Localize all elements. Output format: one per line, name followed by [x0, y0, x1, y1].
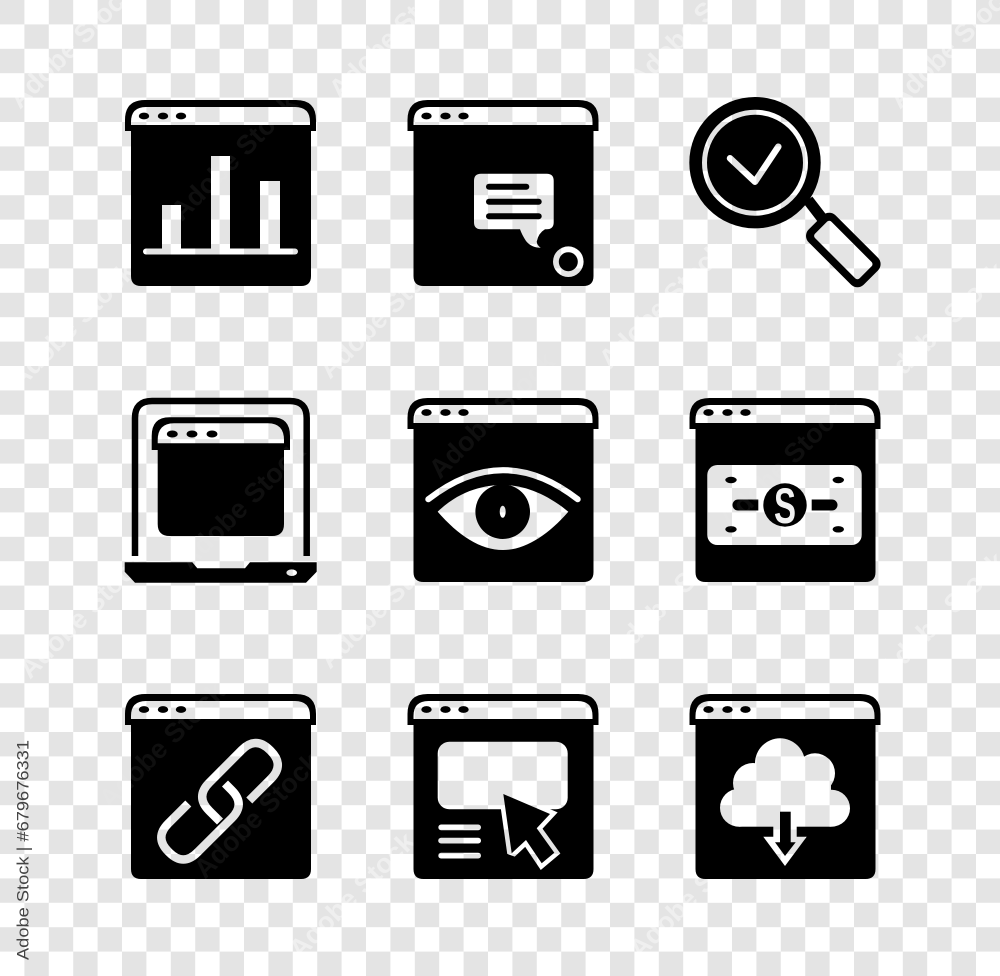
- side credit text: Adobe Stock | #679676331: [14, 740, 32, 960]
- watermark layer on icons: Adobe Stock: [173, 436, 312, 574]
- banknote: [707, 465, 862, 545]
- icon: browser with speech bubble: [408, 100, 598, 286]
- watermark layer on background: Adobe Stock: [623, 826, 762, 964]
- watermark layer on background: Adobe Stock: [13, 546, 152, 684]
- check mark: [730, 147, 778, 182]
- watermark layer on icons: [93, 88, 852, 884]
- icon: browser with bar chart: [125, 100, 316, 286]
- icon: browser with cursor click: [408, 694, 598, 879]
- icon: browser with banknote: [690, 398, 880, 582]
- icon: browser with chain link: [125, 694, 316, 879]
- eye: [438, 484, 568, 550]
- watermark layer on background: Adobe Stock: [313, 246, 452, 384]
- watermark layer on background: Adobe Stock: [593, 236, 732, 374]
- browser window: [152, 417, 290, 536]
- eyebrow: [428, 470, 578, 499]
- cloud: [720, 738, 850, 827]
- watermark layer on icons: Adobe Stock: [713, 396, 852, 534]
- ring: [553, 246, 584, 277]
- text lines: [438, 824, 481, 858]
- chain link: [161, 743, 278, 860]
- watermark layer on background: Adobe Stock: [283, 826, 422, 964]
- cursor arrow: [503, 794, 554, 863]
- icon: browser with eye: [408, 398, 598, 582]
- watermark layer on background: Adobe Stock: [3, 256, 142, 394]
- watermark layer on icons: Adobe Stock: [93, 676, 232, 814]
- icon: laptop with browser window: [125, 401, 317, 583]
- watermark layer on icons: Adobe Stock: [188, 746, 327, 884]
- icon: magnifying glass with check mark: [689, 97, 872, 278]
- download arrow: [763, 812, 807, 866]
- watermark layer on background: Adobe Stock: [313, 536, 452, 674]
- speech bubble: [474, 174, 554, 248]
- handle: [815, 222, 872, 278]
- watermark layer on background: Adobe Stock: [603, 526, 742, 664]
- watermark layer on icons: Adobe Stock: [423, 346, 562, 484]
- banknote: S: [774, 478, 796, 534]
- laptop screen outline: [135, 401, 307, 556]
- watermark layer on icons: Adobe Stock: [165, 88, 304, 226]
- banner box: [438, 742, 568, 809]
- bar chart: [143, 156, 298, 254]
- icon: browser with cloud download: [690, 694, 880, 879]
- laptop base: [125, 562, 317, 583]
